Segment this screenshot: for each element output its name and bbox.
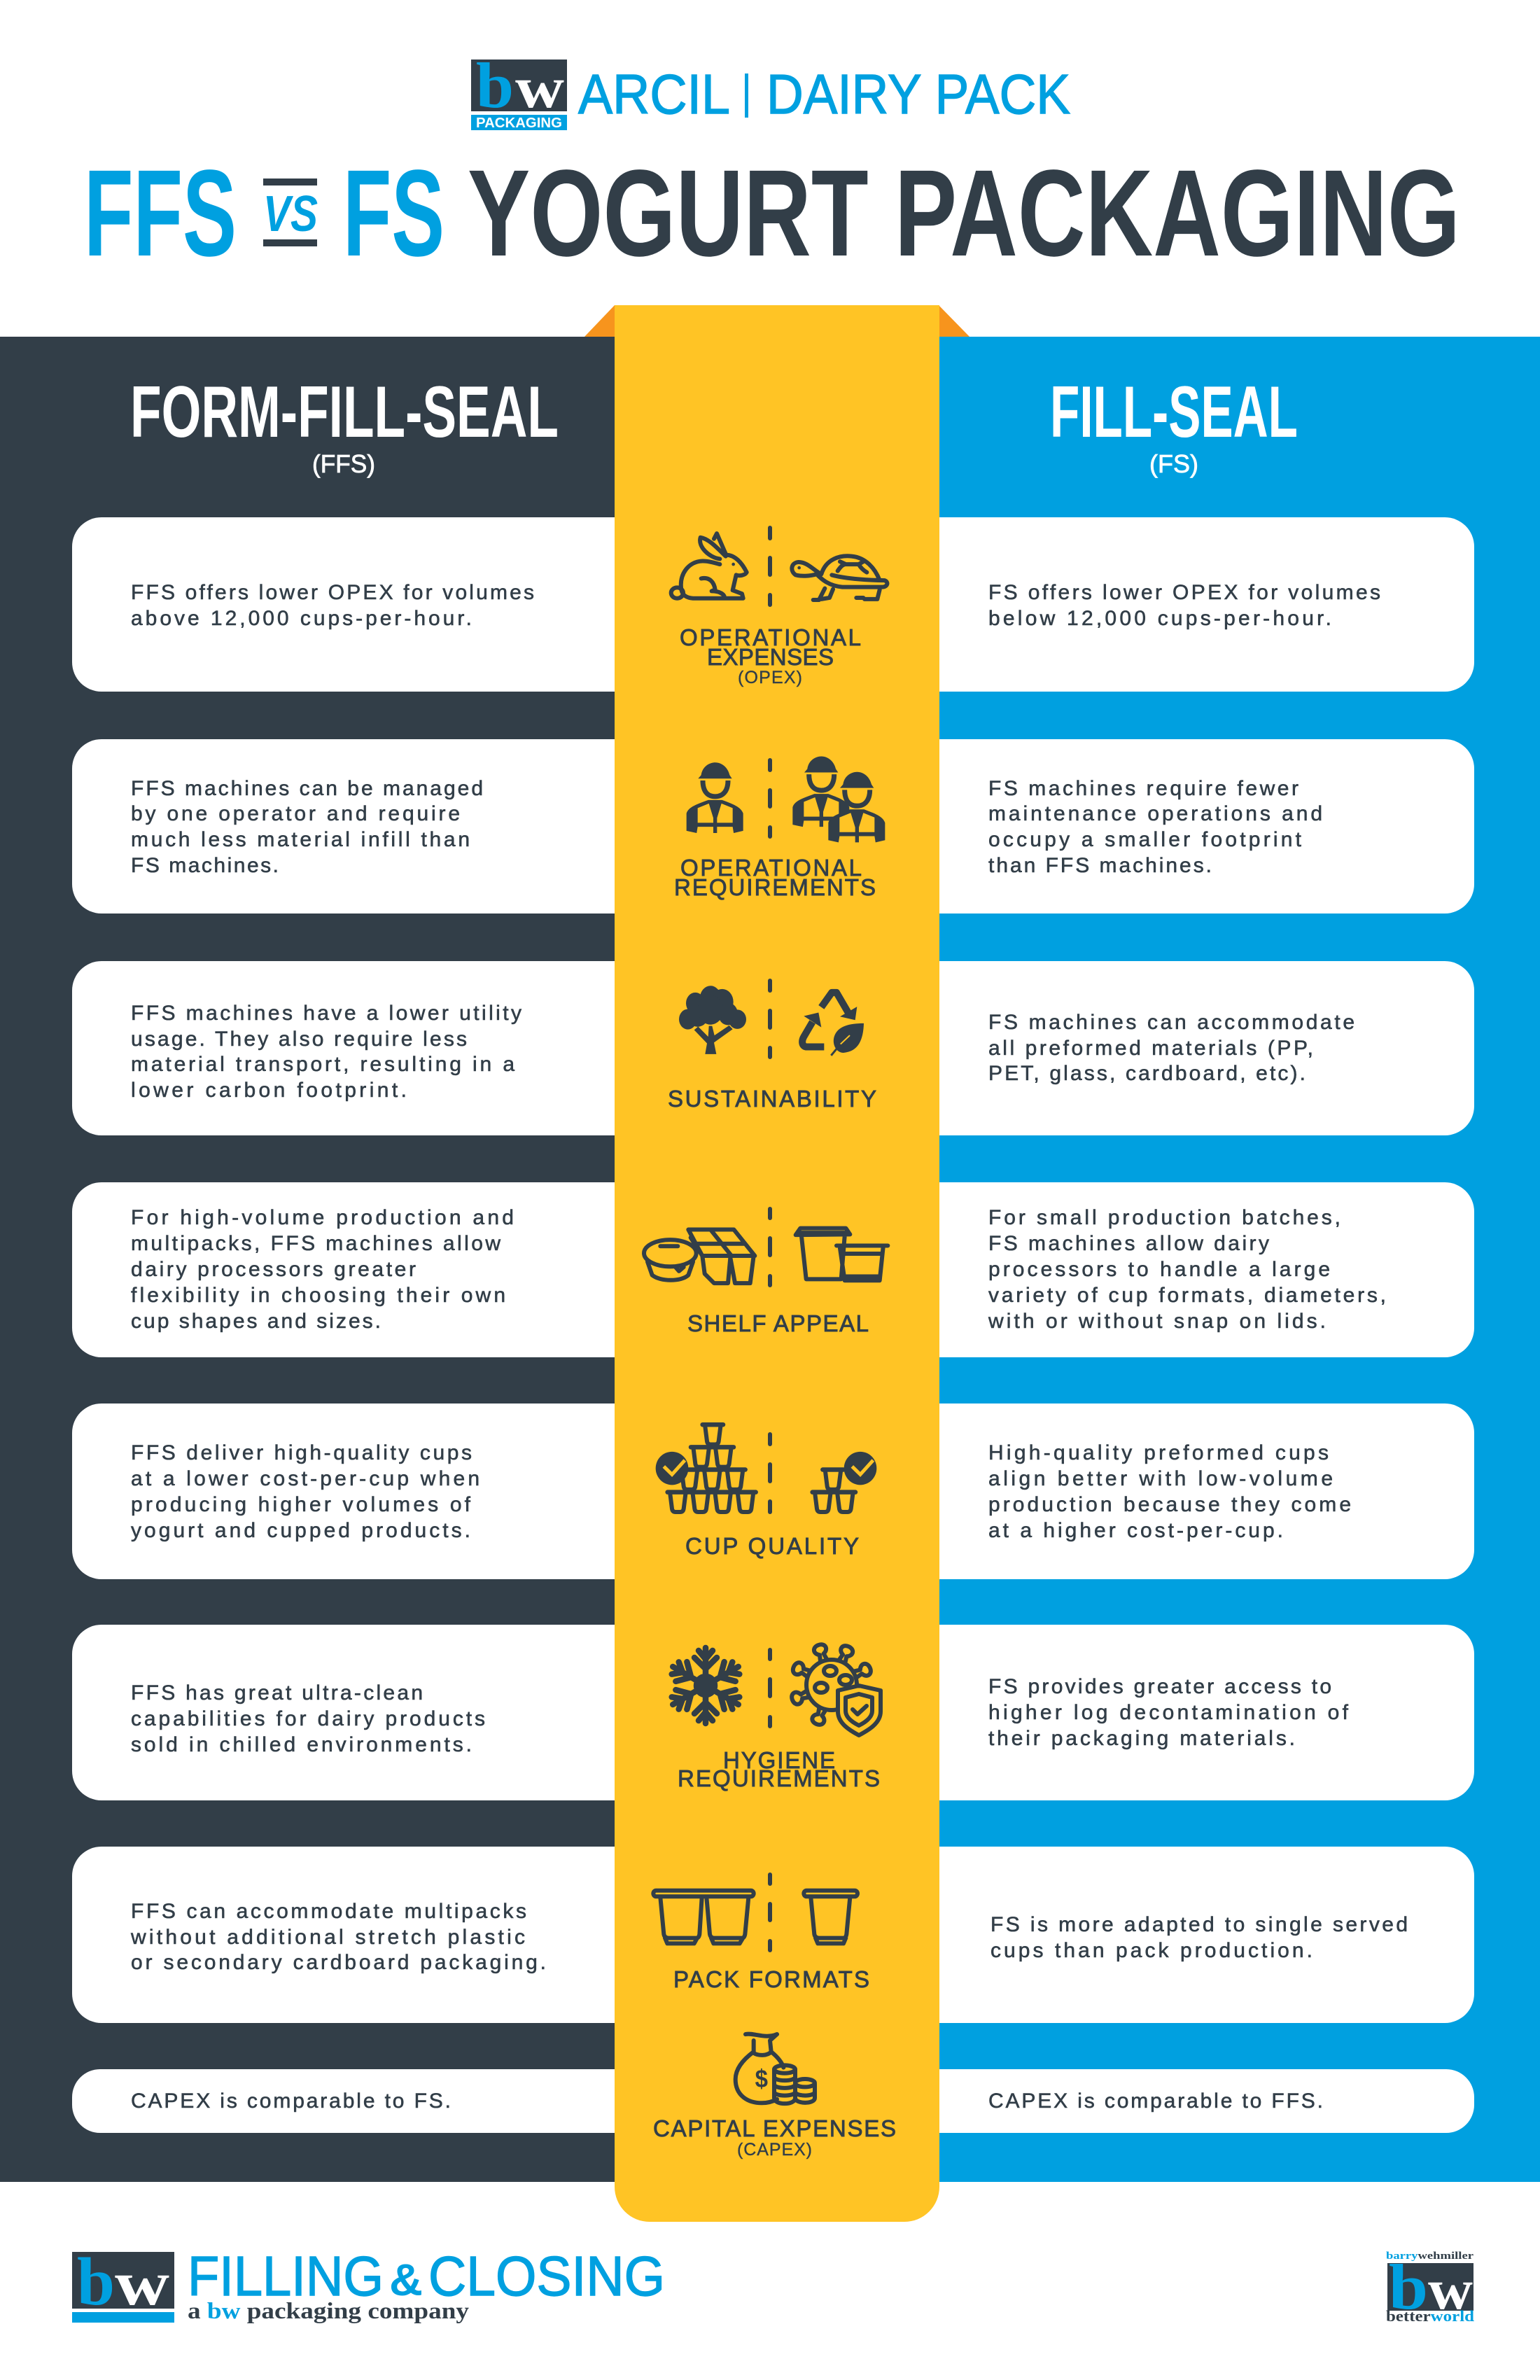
header brand name: ARCIL — [578, 63, 730, 125]
FFS card: operational requirements — [72, 739, 674, 913]
FS card: cup quality: align better with low-volume — [988, 1467, 1333, 1490]
icon: twin cups vs single cup — [653, 1891, 858, 1943]
footer logo: barry-wehmiller better world: barry wehmiller — [1386, 2250, 1474, 2262]
divider dashes: requirements — [768, 758, 772, 839]
footer logo: bw filling and closing — [72, 2244, 174, 2323]
footer logo: barry-wehmiller better world: w — [1428, 2258, 1473, 2321]
heading: form-fill-seal: FORM-FILL-SEAL — [130, 372, 559, 453]
FFS card: hygiene — [72, 1625, 674, 1800]
label: hygiene requirements — [678, 1747, 880, 1791]
header logo: bw packaging: PACKAGING — [476, 115, 562, 131]
panel: centre yellow ribbon — [615, 305, 939, 2222]
FFS card: shelf appeal: cup shapes and sizes. — [131, 1310, 381, 1333]
label: capital expenses — [653, 2115, 896, 2160]
label: cup quality: CUP QUALITY — [685, 1533, 859, 1559]
FFS card: shelf appeal: For high-volume production and — [131, 1206, 514, 1229]
footer logo: bw filling and closing: b — [77, 2244, 115, 2320]
FS card: shelf appeal: processors to handle a large — [988, 1258, 1330, 1281]
label: operational expenses: OPERATIONAL — [680, 624, 861, 650]
FS card: shelf appeal: with or without snap on lids. — [988, 1310, 1326, 1333]
icon: snowflake — [667, 1648, 744, 1723]
divider dashes: OPEX — [768, 526, 772, 607]
label: operational requirements — [674, 855, 876, 900]
FS card: hygiene — [882, 1625, 1474, 1800]
FFS card: sustainability: lower carbon footprint. — [131, 1079, 407, 1102]
header logo: bw packaging: b — [476, 50, 514, 121]
FFS card: hygiene: sold in chilled environments. — [131, 1733, 472, 1756]
label: hygiene requirements: REQUIREMENTS — [678, 1765, 880, 1791]
FS card: operational requirements: occupy a smaller footprint — [988, 828, 1302, 851]
label: operational requirements: REQUIREMENTS — [674, 874, 876, 900]
FFS card: hygiene: capabilities for dairy products — [131, 1707, 485, 1730]
FFS card: cup quality: yogurt and cupped products. — [131, 1519, 470, 1542]
FS card: capex: CAPEX is comparable to FFS. — [988, 2090, 1323, 2113]
footer brand name: FILLING — [188, 2245, 384, 2307]
FFS card: shelf appeal: flexibility in choosing their own — [131, 1284, 505, 1307]
heading: form-fill-seal: (FFS) — [312, 449, 375, 478]
FS card: shelf appeal: variety of cup formats, diameters, — [988, 1284, 1386, 1307]
label: operational requirements: OPERATIONAL — [680, 855, 862, 881]
ribbon fold corners — [584, 305, 969, 337]
FS card: shelf appeal — [882, 1182, 1474, 1357]
label: capital expenses: (CAPEX) — [737, 2140, 812, 2160]
divider dashes: shelf appeal — [768, 1207, 772, 1287]
icon: assorted pots vs preformed cups — [644, 1228, 888, 1283]
FFS card: shelf appeal — [72, 1182, 674, 1357]
FFS card: OPEX — [72, 517, 674, 692]
FS card: OPEX: below 12,000 cups-per-hour. — [988, 607, 1331, 630]
icon: cup pyramid vs small cup stack — [656, 1424, 876, 1512]
label: hygiene requirements: HYGIENE — [723, 1747, 835, 1773]
FFS card: capex — [72, 2069, 674, 2133]
footer logo: barry-wehmiller better world: b — [1389, 2251, 1428, 2323]
icon: tree vs recycle leaf — [679, 986, 864, 1056]
FS card: OPEX: FS offers lower OPEX for volumes — [988, 581, 1380, 604]
FS card: hygiene: their packaging materials. — [988, 1727, 1295, 1750]
FFS card: cup quality: FFS deliver high-quality cups — [131, 1441, 472, 1464]
FFS card: pack formats: or secondary cardboard packaging. — [131, 1951, 546, 1974]
label: pack formats: PACK FORMATS — [673, 1966, 869, 1992]
divider dashes: hygiene — [768, 1648, 772, 1728]
footer brand name — [188, 2245, 665, 2324]
label: operational expenses — [680, 624, 861, 687]
heading: fill-seal: (FS) — [1149, 449, 1198, 478]
footer logo: bw filling and closing: w — [115, 2249, 169, 2318]
header logo: bw packaging — [471, 50, 567, 131]
heading: form-fill-seal — [130, 372, 559, 478]
panel: FS column — [938, 337, 1540, 2182]
FS card: operational requirements — [882, 739, 1474, 913]
FS card: cup quality: at a higher cost-per-cup. — [988, 1519, 1283, 1542]
label: sustainability: SUSTAINABILITY — [668, 1086, 876, 1112]
FS card: operational requirements: FS machines require fewer — [988, 777, 1298, 800]
panel: FFS column — [0, 337, 616, 2182]
FS card: OPEX — [882, 517, 1474, 692]
FFS card: pack formats — [72, 1847, 674, 2023]
FFS card: OPEX: FFS offers lower OPEX for volumes — [131, 581, 534, 604]
FFS card: operational requirements: FFS machines can be managed — [131, 777, 483, 800]
label: capital expenses: CAPITAL EXPENSES — [653, 2115, 896, 2141]
FFS card: sustainability — [72, 961, 674, 1135]
divider dashes: cup quality — [768, 1432, 772, 1514]
FS card: pack formats — [882, 1847, 1474, 2023]
FFS card: cup quality — [72, 1404, 674, 1579]
FFS card: hygiene: FFS has great ultra-clean — [131, 1681, 423, 1704]
title: FS — [343, 145, 444, 282]
title: FFS — [84, 145, 237, 282]
header brand name — [578, 63, 1070, 125]
heading: fill-seal — [1050, 372, 1298, 478]
FFS card: sustainability: material transport, resulting in a — [131, 1053, 514, 1076]
FS card: hygiene: FS provides greater access to — [988, 1675, 1331, 1698]
FFS card: operational requirements: FS machines. — [131, 854, 279, 877]
title: VS — [263, 186, 318, 242]
icon: virus with shield — [790, 1643, 881, 1735]
title — [84, 145, 1460, 282]
heading: fill-seal: FILL-SEAL — [1050, 372, 1298, 453]
divider dashes: pack formats — [768, 1872, 772, 1952]
FFS card: operational requirements: much less material infill than — [131, 828, 470, 851]
FS card: operational requirements: than FFS machines. — [988, 854, 1212, 877]
icon: money bag and coins — [736, 2034, 815, 2104]
label: operational expenses: EXPENSES — [707, 644, 834, 670]
FFS card: OPEX: above 12,000 cups-per-hour. — [131, 607, 472, 630]
FFS card: sustainability: usage. They also require less — [131, 1028, 467, 1051]
header logo: bw packaging: w — [515, 55, 564, 120]
icon: one worker vs two workers — [687, 757, 885, 844]
footer logo: barry-wehmiller better world — [1386, 2250, 1474, 2325]
FS card: sustainability — [882, 961, 1474, 1135]
label: shelf appeal: SHELF APPEAL — [687, 1310, 869, 1336]
FS card: sustainability: FS machines can accommodate — [988, 1011, 1354, 1034]
FFS card: shelf appeal: dairy processors greater — [131, 1258, 416, 1281]
icon: rabbit vs tortoise — [671, 533, 887, 600]
FS card: operational requirements: maintenance operations and — [988, 802, 1322, 825]
footer brand name: CLOSING — [428, 2245, 665, 2307]
header brand name: DAIRY PACK — [766, 63, 1070, 125]
FFS card: capex: CAPEX is comparable to FS. — [131, 2090, 451, 2113]
FS card: cup quality — [882, 1404, 1474, 1579]
FS card: sustainability: all preformed materials (PP, — [988, 1037, 1313, 1060]
FS card: cup quality: production because they come — [988, 1493, 1351, 1516]
FS card: capex — [882, 2069, 1474, 2133]
FFS card: pack formats: FFS can accommodate multipacks — [131, 1900, 526, 1923]
FS card: pack formats: FS is more adapted to single served — [990, 1913, 1408, 1936]
FFS card: sustainability: FFS machines have a lower utility — [131, 1002, 522, 1025]
footer brand name: a bw packaging company — [188, 2299, 470, 2324]
footer logo: barry-wehmiller better world: better world — [1386, 2307, 1474, 2325]
FFS card: pack formats: without additional stretch plastic — [130, 1926, 525, 1949]
divider dashes: sustainability — [768, 979, 772, 1059]
footer brand name: & — [389, 2255, 423, 2305]
icon: money bag and coins: $ — [755, 2066, 768, 2093]
FFS card: cup quality: producing higher volumes of — [131, 1493, 471, 1516]
FS card: pack formats: cups than pack production. — [990, 1939, 1312, 1962]
FFS card: operational requirements: by one operator and require — [131, 802, 460, 825]
FS card: sustainability: PET, glass, cardboard, etc). — [988, 1062, 1306, 1085]
FS card: shelf appeal: For small production batches, — [988, 1206, 1340, 1229]
FFS card: shelf appeal: multipacks, FFS machines allow — [131, 1232, 500, 1255]
FFS card: cup quality: at a lower cost-per-cup when — [131, 1467, 479, 1490]
label: operational expenses: (OPEX) — [738, 668, 802, 687]
FS card: shelf appeal: FS machines allow dairy — [988, 1232, 1269, 1255]
FS card: cup quality: High-quality preformed cups — [988, 1441, 1329, 1464]
FS card: hygiene: higher log decontamination of — [988, 1701, 1349, 1724]
